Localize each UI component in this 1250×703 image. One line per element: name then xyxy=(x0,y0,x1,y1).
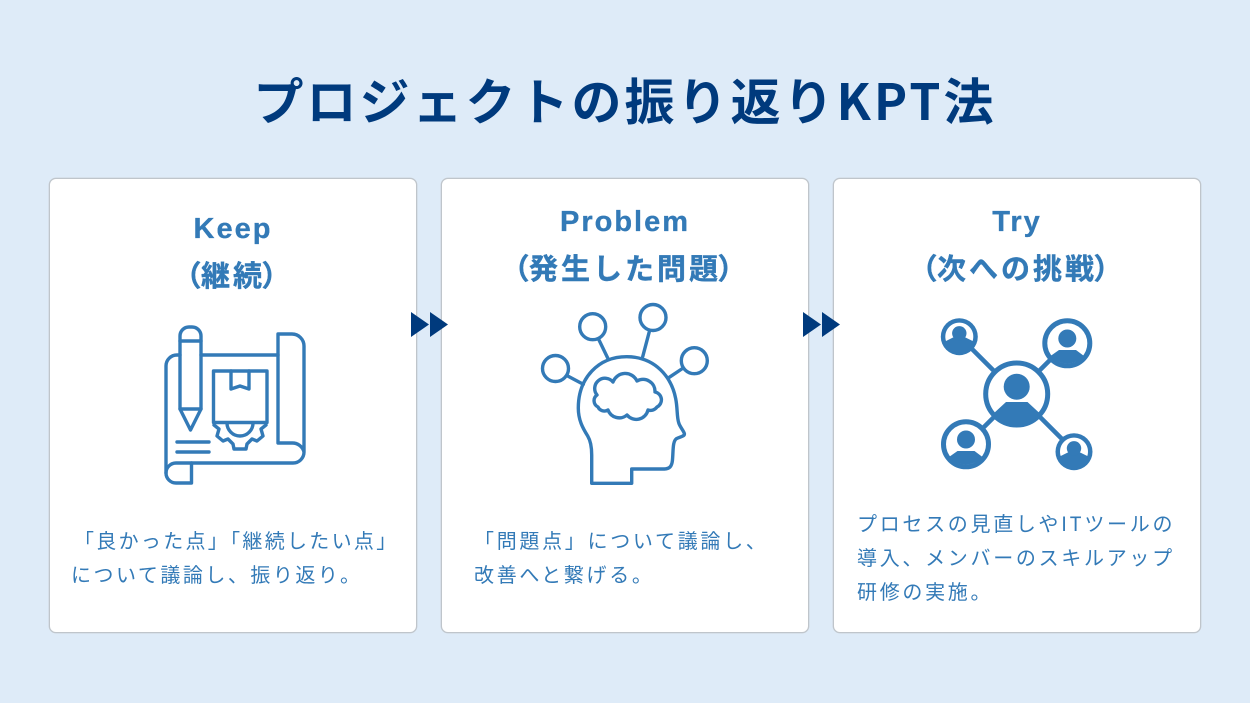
heading: Keep: Keep xyxy=(194,213,272,245)
person: top right xyxy=(1045,321,1090,366)
icon: head with ideas xyxy=(542,304,707,483)
text block: Keep description: について議論し、振り返り。 xyxy=(71,559,362,588)
connector lines xyxy=(970,347,1062,439)
text block: Try description: プロセスの見直しやITツールの xyxy=(857,508,1175,537)
text block: Problem description: 「問題点」について議論し、 xyxy=(474,525,768,554)
arrow: Keep to Problem xyxy=(411,312,448,337)
heading: Problem: （発生した問題） xyxy=(500,254,750,286)
panel: Try xyxy=(833,178,1201,633)
text block: Try description xyxy=(857,508,1175,605)
text block: Keep description: 「良かった点」「継続したい点」 xyxy=(74,525,398,554)
person: centre xyxy=(986,363,1048,425)
person: bottom left xyxy=(944,422,988,467)
panel: Keep xyxy=(49,178,417,633)
heading: Keep: （継続） xyxy=(172,261,294,293)
text block: Try description: 導入、メンバーのスキルアップ xyxy=(857,542,1175,571)
text block: Keep description xyxy=(71,525,398,588)
arrow: Problem to Try xyxy=(803,312,840,337)
heading: Try: Try xyxy=(992,206,1042,238)
heading: Problem xyxy=(500,206,750,286)
person: top left xyxy=(941,318,978,355)
text block: Try description: 研修の実施。 xyxy=(857,576,993,605)
icon: people network xyxy=(941,318,1092,470)
person: bottom right xyxy=(1056,433,1092,470)
text block: Problem description xyxy=(474,525,768,588)
panel: Problem xyxy=(441,178,809,633)
heading: Keep xyxy=(172,213,294,293)
title: プロジェクトの振り返りKPT法 xyxy=(254,63,996,135)
heading: Try: （次への挑戦） xyxy=(908,254,1126,286)
icon: blueprint with pencil xyxy=(166,327,304,483)
heading: Try xyxy=(908,206,1126,286)
heading: Problem: Problem xyxy=(560,206,690,238)
text block: Problem description: 改善へと繋げる。 xyxy=(474,559,655,588)
